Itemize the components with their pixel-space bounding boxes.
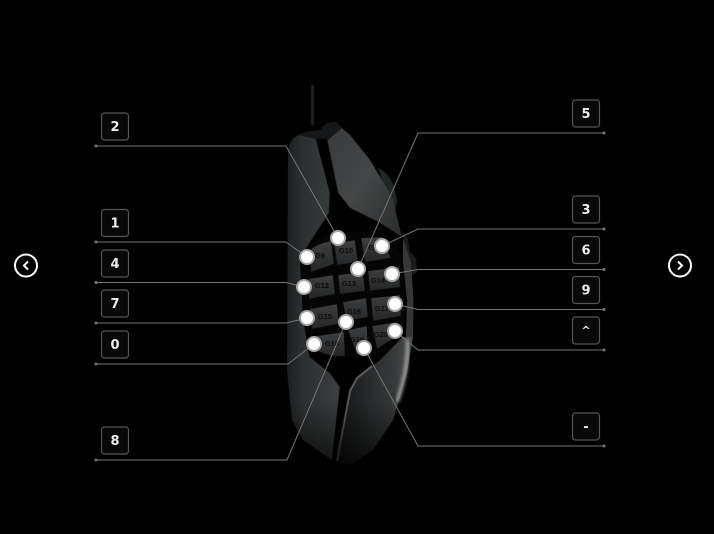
lower channel bbox=[306, 337, 402, 461]
key label 2 bbox=[102, 113, 128, 140]
key label minus: - bbox=[583, 420, 589, 435]
keys: G13 bbox=[342, 279, 356, 288]
side buttons bbox=[402, 230, 417, 277]
callout markers bbox=[297, 231, 402, 355]
key label 4 bbox=[102, 250, 128, 277]
key label 1 bbox=[102, 210, 128, 236]
side scroll wheel bbox=[378, 168, 397, 213]
key label 6 bbox=[572, 236, 600, 264]
lower right plate bbox=[337, 337, 413, 465]
key label 8 bbox=[102, 427, 128, 454]
keys: G12 bbox=[315, 281, 329, 290]
keys: G19 bbox=[350, 335, 364, 344]
upper dark band bbox=[300, 139, 405, 262]
key label 5: 5 bbox=[581, 107, 591, 122]
callout lines bbox=[94, 132, 606, 462]
key label minus bbox=[572, 413, 600, 440]
key label caret bbox=[572, 317, 600, 344]
mouse illustration bbox=[287, 85, 417, 470]
key label 9 bbox=[572, 276, 600, 304]
keys: G11 bbox=[368, 243, 382, 252]
key label 2: 2 bbox=[110, 120, 120, 135]
nose top bbox=[298, 122, 342, 140]
mouse body left plate bbox=[287, 135, 340, 460]
key label 0 bbox=[102, 331, 128, 358]
key label 4: 4 bbox=[110, 257, 120, 272]
right rim bbox=[403, 238, 414, 338]
key label 8: 8 bbox=[110, 434, 120, 449]
key label 0: 0 bbox=[110, 338, 120, 353]
key label 5 bbox=[572, 100, 600, 127]
keys: G17 bbox=[375, 304, 389, 313]
keys: G10 bbox=[339, 246, 353, 255]
keys: G15 bbox=[318, 312, 332, 321]
cord bbox=[311, 85, 314, 125]
icon: previous arrow bbox=[15, 254, 37, 276]
keys: G16 bbox=[347, 307, 361, 316]
keys: G18 bbox=[325, 339, 339, 348]
upper right plate bbox=[327, 123, 402, 237]
keys: G14 bbox=[371, 276, 386, 285]
right rim glow bbox=[397, 340, 408, 402]
key label 3: 3 bbox=[581, 203, 591, 218]
key label 1: 1 bbox=[110, 216, 120, 232]
key label 7: 7 bbox=[110, 297, 120, 312]
lower edge highlight bbox=[337, 366, 372, 461]
keys bbox=[308, 237, 401, 356]
key label 7 bbox=[102, 290, 128, 317]
thumb pad well bbox=[301, 232, 405, 358]
icon: next arrow bbox=[669, 254, 691, 276]
key label caret: ^ bbox=[581, 324, 591, 337]
key label 6: 6 bbox=[581, 244, 591, 258]
keys: G9 bbox=[315, 251, 325, 260]
key label 9: 9 bbox=[581, 284, 591, 298]
bottom fade bbox=[287, 400, 410, 470]
key label 3 bbox=[572, 196, 600, 223]
keys: G20 bbox=[374, 330, 388, 339]
